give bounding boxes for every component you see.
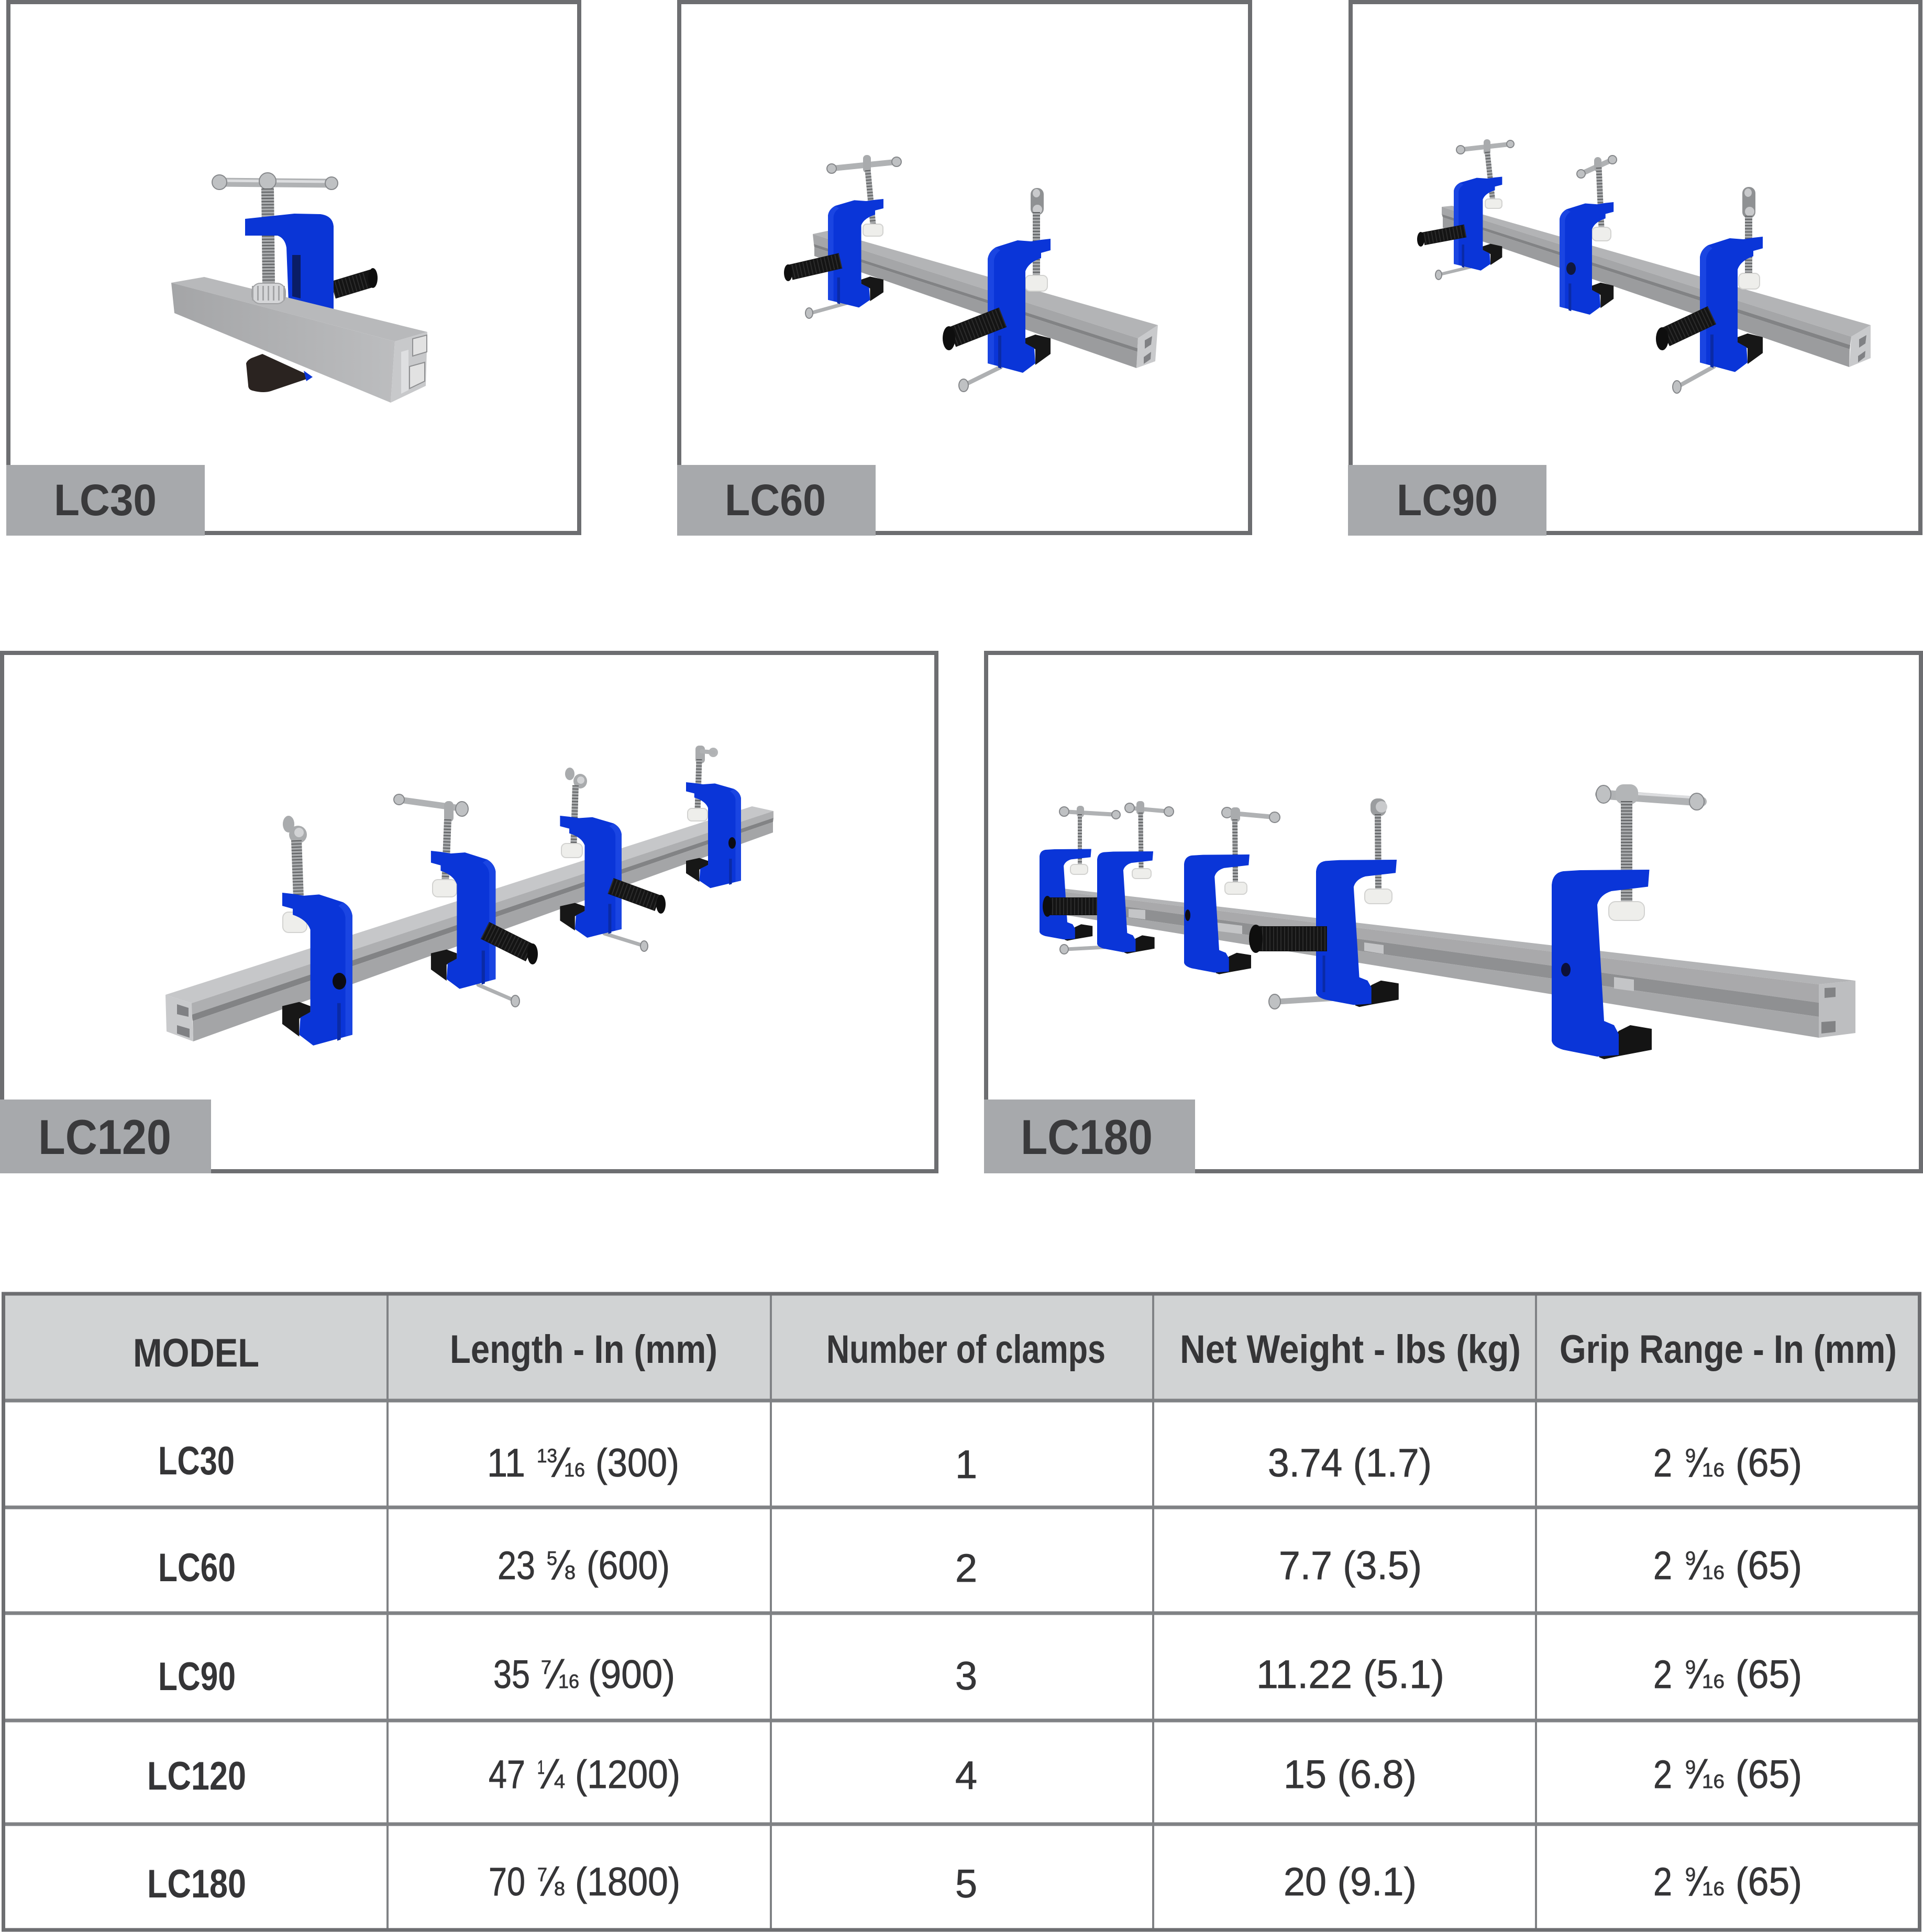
row LC30: 11 bbox=[487, 1441, 525, 1485]
panel: LC60 bbox=[677, 2, 1250, 536]
clamp 4 bbox=[1249, 798, 1399, 1009]
panel frame LC120 bbox=[2, 653, 936, 1171]
row LC180: / bbox=[538, 1860, 561, 1904]
table header row bbox=[133, 1327, 1897, 1375]
row LC180: 20 (9.1) bbox=[1284, 1860, 1417, 1904]
row LC180: 7 bbox=[537, 1864, 547, 1885]
row LC90: (65) bbox=[1736, 1652, 1802, 1697]
row LC180: 2 bbox=[1653, 1860, 1672, 1904]
row LC120: / bbox=[1687, 1752, 1710, 1797]
model label LC180 bbox=[984, 1100, 1195, 1173]
row LC90: 7 bbox=[541, 1657, 551, 1678]
row LC120: 9 bbox=[1685, 1757, 1696, 1778]
model label LC120: LC120 bbox=[38, 1109, 171, 1164]
row LC120: 4 bbox=[955, 1753, 977, 1798]
row LC30: LC30 bbox=[158, 1439, 235, 1483]
specification table bbox=[3, 1294, 1920, 1930]
row LC30: / bbox=[1687, 1441, 1710, 1485]
model label LC120 bbox=[0, 1100, 211, 1173]
black foot pad bbox=[246, 354, 313, 392]
product image: LC90 three clamps on rail bbox=[1417, 139, 1871, 393]
clamp 4 bbox=[686, 746, 741, 888]
row LC60: 2 bbox=[955, 1546, 977, 1591]
row LC120: 16 bbox=[1702, 1771, 1725, 1792]
blue clamp body bbox=[245, 214, 334, 309]
panel frame LC180 bbox=[986, 653, 1921, 1171]
row LC180 bbox=[147, 1860, 1802, 1906]
row LC90: 16 bbox=[1702, 1671, 1725, 1692]
model label LC30: LC30 bbox=[54, 475, 157, 525]
row LC90: (900) bbox=[588, 1652, 675, 1697]
row LC120: 15 (6.8) bbox=[1284, 1752, 1417, 1797]
row LC180: 8 bbox=[554, 1878, 565, 1900]
row LC60: (600) bbox=[587, 1544, 670, 1588]
row LC120: / bbox=[538, 1752, 561, 1797]
row LC120: 1 bbox=[537, 1757, 545, 1778]
row LC30: 13 bbox=[537, 1445, 557, 1467]
knurled pad bbox=[252, 283, 285, 304]
row LC60: (65) bbox=[1736, 1544, 1802, 1588]
row LC30: 2 bbox=[1653, 1441, 1672, 1485]
row LC60: 5 bbox=[547, 1548, 557, 1569]
row LC30: 1 bbox=[955, 1442, 977, 1487]
panel frame LC30 bbox=[8, 2, 579, 533]
row LC30: (300) bbox=[595, 1441, 679, 1485]
row LC60: 8 bbox=[565, 1562, 576, 1583]
row LC60: / bbox=[1687, 1544, 1710, 1588]
row LC60: 2 bbox=[1653, 1544, 1672, 1588]
row LC30 bbox=[158, 1439, 1802, 1487]
row LC120: 47 bbox=[489, 1752, 525, 1797]
row LC180: 70 bbox=[489, 1860, 525, 1904]
model label LC90: LC90 bbox=[1397, 475, 1498, 525]
clamp 2 bbox=[943, 188, 1051, 392]
aluminium rail bbox=[1063, 889, 1855, 1038]
grip handle bbox=[333, 268, 378, 290]
model label LC60: LC60 bbox=[725, 475, 826, 525]
row LC60: / bbox=[549, 1544, 572, 1588]
table grid lines bbox=[3, 1294, 1920, 1930]
aluminium rail bbox=[165, 806, 773, 1041]
product image: LC120 four clamps on rail bbox=[165, 746, 773, 1046]
row LC30: 16 bbox=[564, 1459, 585, 1481]
row LC120: (1200) bbox=[575, 1752, 680, 1797]
clamp 2 bbox=[1560, 156, 1617, 315]
clamp 1 bbox=[784, 155, 901, 318]
panel: LC30 bbox=[6, 2, 579, 536]
row LC180: LC180 bbox=[147, 1862, 246, 1906]
row LC120: (65) bbox=[1736, 1752, 1802, 1797]
table header row: Length - In (mm) bbox=[450, 1327, 717, 1372]
row LC180: (1800) bbox=[575, 1860, 680, 1904]
model label LC60 bbox=[677, 465, 876, 536]
row LC120: LC120 bbox=[147, 1754, 246, 1798]
row LC120: 4 bbox=[554, 1771, 565, 1792]
row LC90: 9 bbox=[1685, 1657, 1696, 1678]
model label LC30 bbox=[6, 465, 205, 536]
clamp 2 bbox=[394, 794, 538, 1007]
row LC90: 16 bbox=[558, 1671, 579, 1692]
row LC60: 7.7 (3.5) bbox=[1279, 1544, 1422, 1588]
panel frame LC90 bbox=[1351, 2, 1920, 533]
row LC60: 23 bbox=[498, 1544, 535, 1588]
row LC30: / bbox=[549, 1441, 572, 1485]
aluminium rail bbox=[813, 231, 1158, 368]
table header row: MODEL bbox=[133, 1331, 259, 1375]
row LC180: 5 bbox=[955, 1862, 977, 1906]
row LC90 bbox=[158, 1652, 1802, 1699]
row LC120: 2 bbox=[1653, 1752, 1672, 1797]
row LC180: / bbox=[1687, 1860, 1710, 1904]
grip screw hole bbox=[1566, 262, 1576, 275]
threaded screw bbox=[268, 188, 269, 285]
panel: LC180 bbox=[984, 653, 1921, 1173]
row LC90: / bbox=[544, 1652, 567, 1697]
row LC30: 3.74 (1.7) bbox=[1268, 1441, 1432, 1485]
row LC60: LC60 bbox=[158, 1546, 236, 1590]
table header row: Net Weight - lbs (kg) bbox=[1180, 1327, 1521, 1372]
clamp 3 bbox=[1656, 187, 1763, 393]
aluminium rail bbox=[1442, 206, 1871, 367]
panel frame LC60 bbox=[679, 2, 1250, 533]
row LC60 bbox=[158, 1544, 1802, 1591]
row LC90: 35 bbox=[493, 1652, 530, 1697]
clamp 2 bbox=[1060, 801, 1174, 954]
row LC90: / bbox=[1687, 1652, 1710, 1697]
row LC90: 3 bbox=[955, 1654, 977, 1698]
row LC60: 9 bbox=[1685, 1548, 1696, 1569]
panel: LC120 bbox=[0, 653, 936, 1173]
clamp 1 bbox=[1040, 806, 1120, 941]
table header row: Number of clamps bbox=[826, 1327, 1106, 1372]
row LC180: (65) bbox=[1736, 1860, 1802, 1904]
T handle bbox=[212, 173, 338, 190]
clamp 5 bbox=[1552, 784, 1704, 1059]
row LC90: LC90 bbox=[158, 1655, 236, 1699]
product image: LC60 two clamps on rail bbox=[784, 155, 1158, 392]
clamp 1 bbox=[1417, 139, 1514, 280]
row LC30: (65) bbox=[1736, 1441, 1802, 1485]
row LC60: 16 bbox=[1702, 1562, 1725, 1583]
clamp 3 bbox=[1184, 807, 1280, 974]
row LC90: 11.22 (5.1) bbox=[1256, 1652, 1444, 1697]
table header background bbox=[4, 1294, 1919, 1401]
row LC180: 9 bbox=[1685, 1864, 1696, 1885]
clamp 3 bbox=[560, 768, 666, 951]
panel: LC90 bbox=[1348, 2, 1920, 536]
product image: LC30 single clamp on rail bbox=[171, 173, 427, 403]
clamp 1 bbox=[282, 816, 352, 1046]
model label LC90 bbox=[1348, 465, 1546, 536]
row LC30: 9 bbox=[1685, 1445, 1696, 1467]
model label LC180: LC180 bbox=[1021, 1109, 1153, 1164]
row LC180: 16 bbox=[1702, 1878, 1725, 1900]
row LC120 bbox=[147, 1752, 1802, 1798]
aluminium rail bbox=[171, 277, 427, 403]
row LC30: 16 bbox=[1702, 1459, 1725, 1481]
row LC90: 2 bbox=[1653, 1652, 1672, 1697]
product image: LC180 five clamps on rail bbox=[1040, 784, 1855, 1059]
